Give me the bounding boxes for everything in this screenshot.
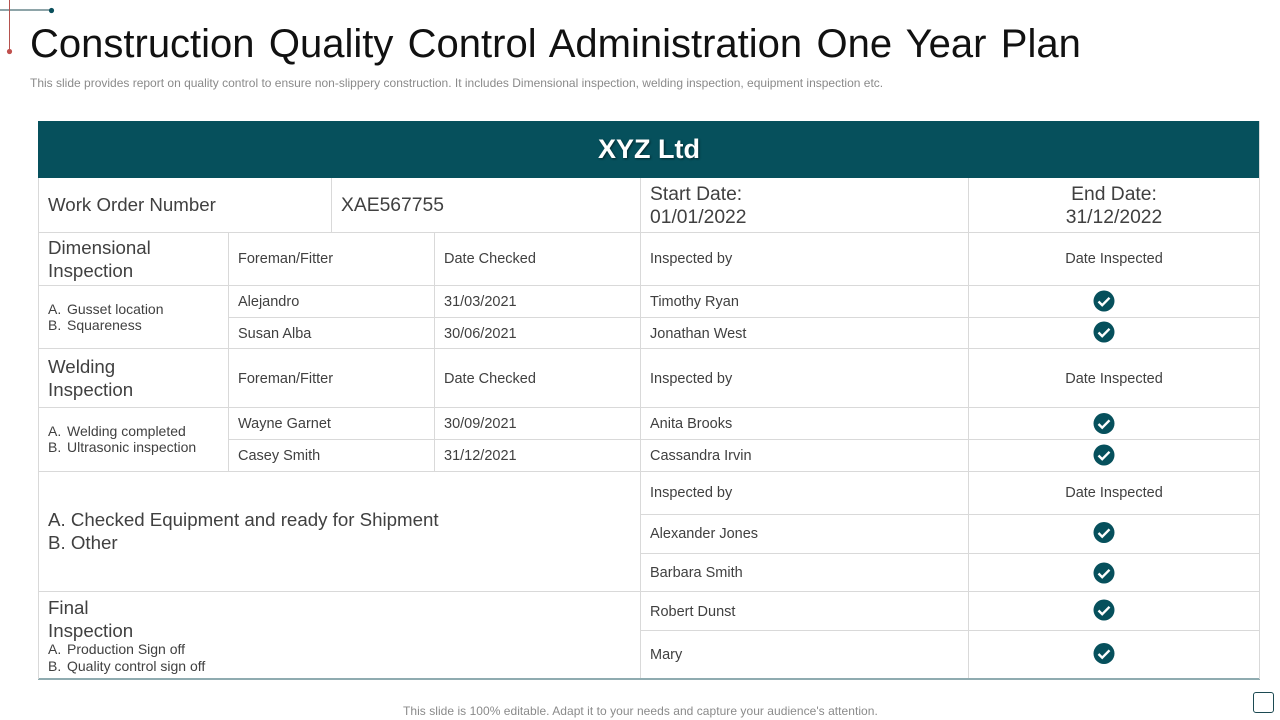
- welding inspection section: 31/12/2021: [444, 448, 517, 464]
- dimensional inspection section: Dimensional: [48, 237, 151, 258]
- final inspection section: Inspection: [48, 620, 133, 641]
- welding inspection section: Cassandra Irvin: [650, 448, 752, 464]
- dimensional inspection section: [48, 237, 1163, 342]
- dimensional inspection section: Timothy Ryan: [650, 294, 739, 310]
- final inspection section: Quality control sign off: [67, 658, 205, 674]
- welding inspection section: Wayne Garnet: [238, 416, 331, 432]
- equipment section: Alexander Jones: [650, 526, 758, 542]
- subtitle: This slide provides report on quality control to ensure non-slippery construction. It includes Dimensional inspection, welding inspection, equipment inspection etc.: [30, 76, 883, 90]
- table: [38, 121, 1260, 680]
- dimensional inspection section: Gusset location: [67, 301, 164, 317]
- work order row: XAE567755: [341, 195, 444, 216]
- work order row: End Date:: [1071, 184, 1157, 205]
- check icons: [1094, 290, 1114, 664]
- equipment section: Inspected by: [650, 485, 732, 501]
- welding inspection section: Ultrasonic inspection: [67, 439, 196, 455]
- work order row: Start Date:: [650, 184, 742, 205]
- final inspection section: A.: [48, 641, 61, 657]
- final inspection section: Robert Dunst: [650, 604, 735, 620]
- welding inspection section: Date Inspected: [1065, 371, 1163, 387]
- final inspection section: B.: [48, 658, 61, 674]
- equipment section: Barbara Smith: [650, 565, 743, 581]
- dimensional inspection section: Susan Alba: [238, 326, 311, 342]
- welding inspection section: Welding: [48, 356, 115, 377]
- welding inspection section: Casey Smith: [238, 448, 320, 464]
- dimensional inspection section: 31/03/2021: [444, 294, 517, 310]
- equipment section: [48, 485, 1163, 581]
- final inspection section: Final: [48, 597, 89, 618]
- dimensional inspection section: Date Inspected: [1065, 251, 1163, 267]
- table banner: [38, 121, 1260, 178]
- dimensional inspection section: Jonathan West: [650, 326, 746, 342]
- title: Construction Quality Control Administration One Year Plan: [30, 22, 1081, 66]
- corner checkbox icon: [1253, 692, 1274, 713]
- equipment section: B. Other: [48, 532, 118, 553]
- table banner: XYZ Ltd: [598, 134, 700, 164]
- welding inspection section: [48, 356, 1163, 464]
- dimensional inspection section: Date Checked: [444, 251, 536, 267]
- final inspection section: Production Sign off: [67, 641, 185, 657]
- welding inspection section: Foreman/Fitter: [238, 371, 333, 387]
- work order row: 31/12/2022: [1066, 207, 1162, 228]
- dimensional inspection section: Inspection: [48, 260, 133, 281]
- dimensional inspection section: A.: [48, 301, 61, 317]
- dimensional inspection section: Alejandro: [238, 294, 299, 310]
- dimensional inspection section: B.: [48, 317, 61, 333]
- welding inspection section: Date Checked: [444, 371, 536, 387]
- welding inspection section: B.: [48, 439, 61, 455]
- welding inspection section: Anita Brooks: [650, 416, 732, 432]
- welding inspection section: Inspection: [48, 379, 133, 400]
- decorative corner lines icon: [0, 0, 54, 54]
- welding inspection section: Inspected by: [650, 371, 732, 387]
- equipment section: A. Checked Equipment and ready for Shipment: [48, 509, 439, 530]
- work order row: 01/01/2022: [650, 207, 747, 228]
- final inspection section: Mary: [650, 647, 682, 663]
- welding inspection section: Welding completed: [67, 423, 186, 439]
- welding inspection section: A.: [48, 423, 61, 439]
- footer note: This slide is 100% editable. Adapt it to your needs and capture your audience's attention.: [403, 704, 878, 718]
- welding inspection section: 30/09/2021: [444, 416, 517, 432]
- dimensional inspection section: Squareness: [67, 317, 142, 333]
- dimensional inspection section: 30/06/2021: [444, 326, 517, 342]
- dimensional inspection section: Foreman/Fitter: [238, 251, 333, 267]
- dimensional inspection section: Inspected by: [650, 251, 732, 267]
- final inspection section: [48, 597, 736, 674]
- work order row: Work Order Number: [48, 194, 216, 215]
- equipment section: Date Inspected: [1065, 485, 1163, 501]
- work order row: [48, 184, 1162, 228]
